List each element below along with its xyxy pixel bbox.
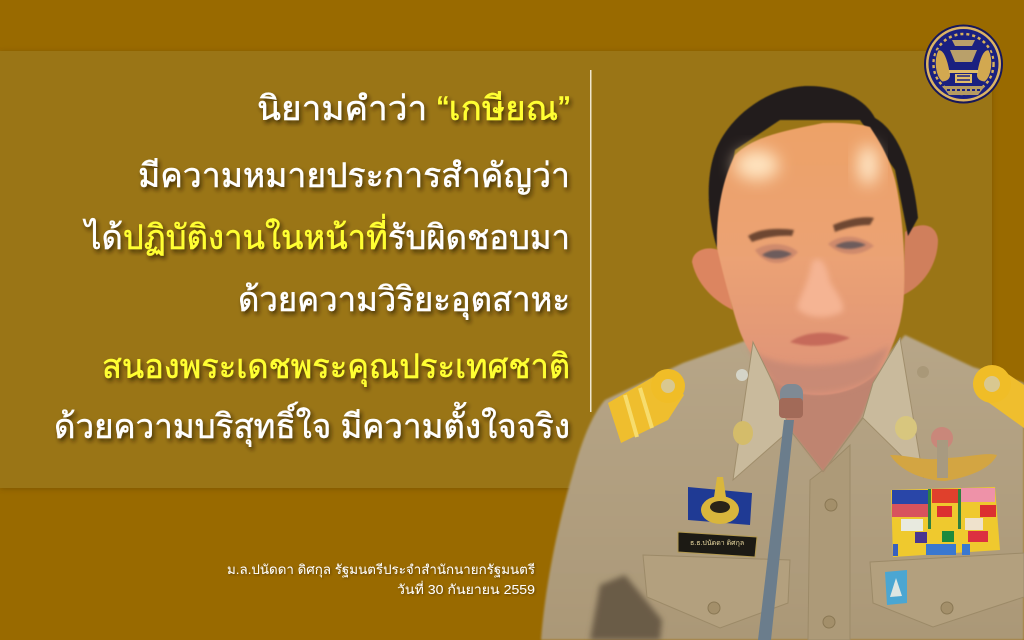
epaulette right — [973, 365, 1024, 428]
uniform body — [541, 335, 1024, 640]
quote line 6: ด้วยความบริสุทธิ์ใจ มีความตั้งใจจริง — [54, 401, 570, 447]
collar left — [733, 342, 823, 480]
nose — [797, 259, 843, 317]
sleeve fold shadow — [590, 575, 662, 640]
mouth — [790, 333, 850, 346]
microphone — [758, 384, 803, 640]
quote line 1: นิยามคำว่า “เกษียณ” — [257, 90, 570, 128]
pocket right — [870, 553, 1024, 627]
eyebrows — [748, 217, 874, 242]
face — [717, 123, 904, 395]
eyes — [762, 241, 866, 259]
divider line — [590, 70, 592, 412]
cheek lower shading — [745, 345, 890, 393]
shirt placket — [808, 445, 850, 640]
collar pin right — [895, 416, 917, 440]
hair — [709, 86, 918, 248]
quote text — [54, 90, 570, 447]
seal right guardian lion — [976, 50, 992, 82]
panel: quote background — [0, 51, 992, 488]
seal central bowl — [950, 40, 977, 62]
seal outer script ring — [934, 34, 994, 94]
attribution date: วันที่ 30 กันยายน 2559 — [397, 581, 535, 597]
neck — [750, 320, 900, 472]
quote line 2: มีความหมายประการสำคัญว่า — [138, 157, 570, 195]
quote line 3: ได้ปฏิบัติงานในหน้าที่รับผิดชอบมา — [82, 214, 570, 257]
seal base — [949, 70, 978, 73]
collar right — [823, 338, 923, 477]
name plate: ธ.ธ.ปนัดดา ดิศกุล — [690, 539, 744, 547]
quote line 4: ด้วยความวิริยะอุตสาหะ — [238, 281, 570, 320]
forehead highlight left — [735, 150, 779, 180]
ear right — [903, 225, 938, 295]
name plate — [678, 532, 757, 557]
epaulette left — [608, 369, 685, 443]
portrait of officer in uniform — [541, 86, 1024, 640]
quote line 5: สนองพระเดชพระคุณประเทศชาติ — [102, 348, 570, 387]
blue unit badge — [688, 477, 752, 525]
shirt buttons — [708, 499, 953, 628]
shoulder button left — [736, 369, 748, 381]
blue pocket pin — [885, 570, 907, 605]
government seal emblem — [924, 24, 1003, 104]
attribution name: ม.ล.ปนัดดา ดิศกุล รัฐมนตรีประจำสำนักนายกรัฐมนตรี — [227, 562, 535, 578]
shoulder button right — [917, 366, 929, 378]
pocket left — [643, 555, 790, 628]
wings insignia — [890, 427, 997, 481]
forehead highlight right — [858, 145, 878, 185]
attribution caption — [227, 562, 535, 597]
seal bottom band — [942, 86, 985, 95]
seal left guardian lion — [935, 50, 951, 82]
eye sockets — [755, 237, 874, 263]
medal ribbons — [891, 487, 1000, 557]
ear left — [692, 248, 733, 310]
collar pin left — [733, 421, 753, 445]
